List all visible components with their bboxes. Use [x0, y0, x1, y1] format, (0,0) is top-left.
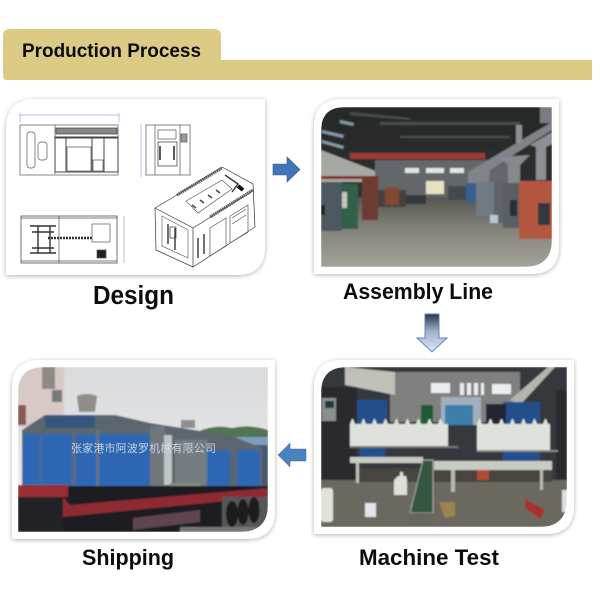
header banner: [3, 29, 592, 80]
watermark: 张家港市阿波罗机械有限公司: [71, 441, 216, 455]
assembly card: [314, 99, 559, 274]
technical drawings: [20, 113, 255, 267]
label: machine test: Machine Test: [359, 545, 500, 570]
label: shipping: Shipping: [82, 545, 174, 570]
photo: factory hall: [321, 107, 552, 267]
label: assembly line: Assembly Line: [343, 279, 493, 304]
photo: truck shipment: [18, 367, 268, 532]
panel: assembly line: [314, 99, 559, 274]
title: Production Process: [22, 40, 201, 62]
arrow: test to shipping: [278, 443, 306, 467]
test card: [314, 360, 574, 534]
arrow: assembly to test: [417, 314, 447, 352]
panel: shipping: [12, 360, 275, 539]
photo: bottle test line: [321, 367, 567, 527]
label: design: Design: [93, 282, 174, 310]
arrow: design to assembly: [273, 157, 300, 182]
panel: machine test: [314, 360, 574, 534]
design card: [6, 99, 265, 275]
header tab and band: [3, 29, 592, 80]
panel: design: [6, 99, 265, 275]
shipping card: [12, 360, 275, 539]
